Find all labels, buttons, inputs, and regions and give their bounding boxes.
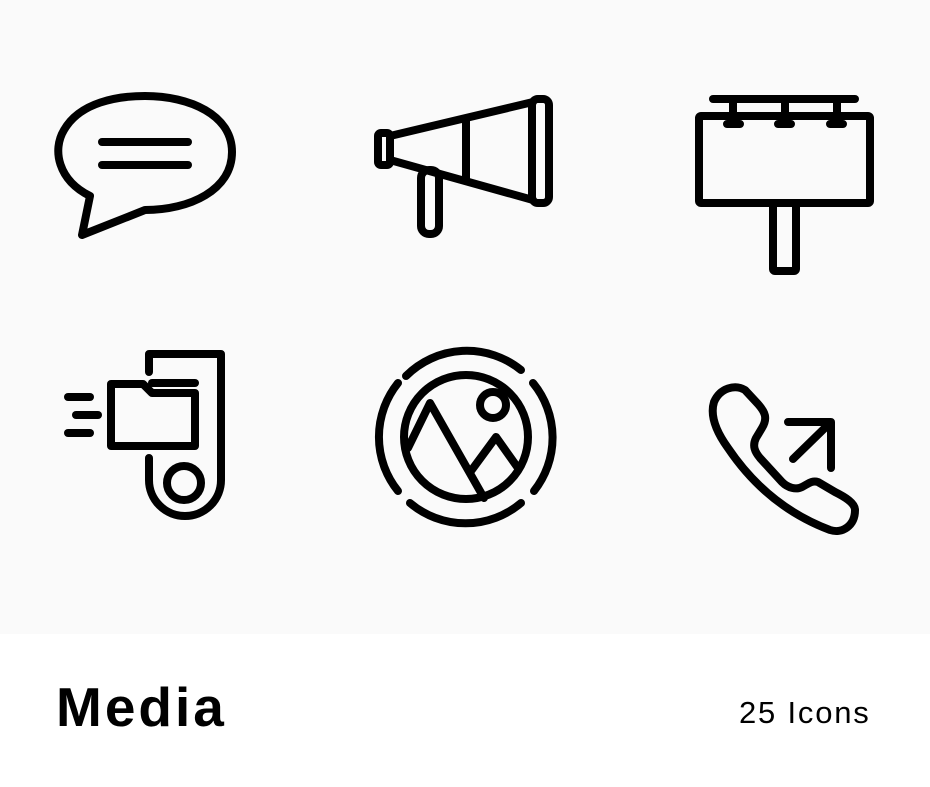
icon: speech bubble — [58, 96, 232, 235]
icon: outgoing call — [713, 387, 855, 531]
icon: image circle — [379, 351, 553, 523]
icon: megaphone — [378, 99, 549, 234]
icon: folder transfer — [68, 354, 221, 516]
title: Media — [56, 676, 227, 738]
icon: billboard — [699, 99, 870, 271]
subtitle: icon count: 25 Icons — [739, 695, 871, 730]
